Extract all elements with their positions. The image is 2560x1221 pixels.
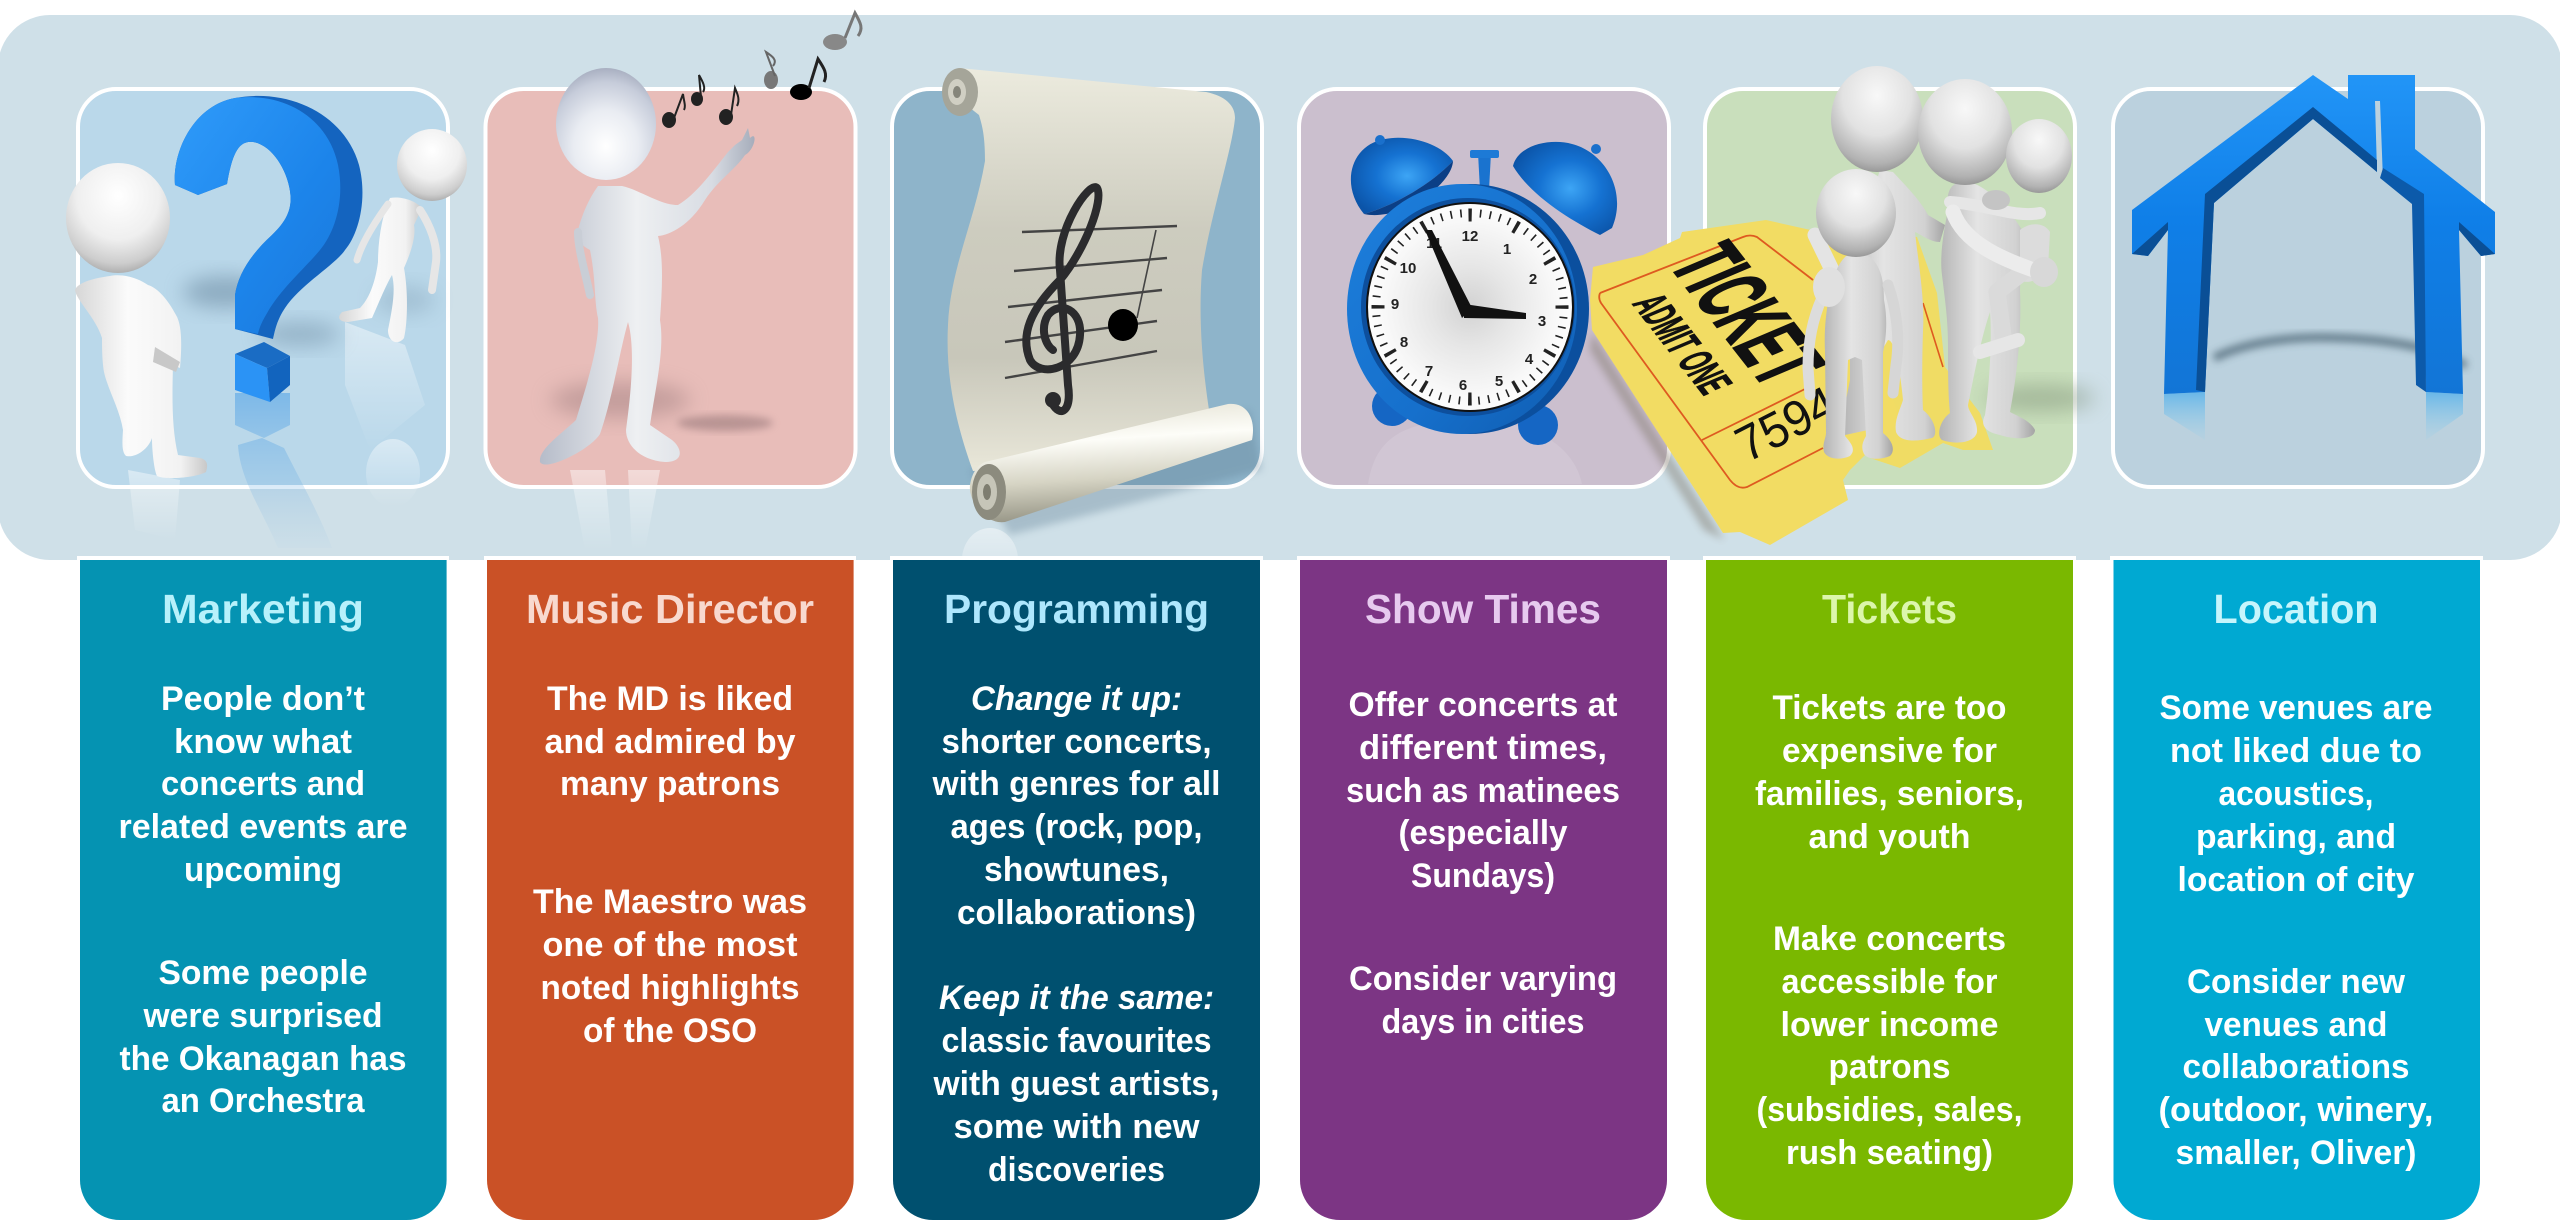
panel: music director: [484, 556, 856, 1220]
icon: right white figure: [339, 129, 467, 342]
shadow: house: [2214, 338, 2466, 366]
icon: carried child: [1950, 119, 2072, 352]
text block: keep it the same: discoveries: [988, 1151, 1165, 1189]
text block: show times second point: days in cities: [1382, 1003, 1584, 1041]
icon: front ticket: [1590, 220, 1900, 545]
icon: family of white figures: [1808, 66, 2072, 459]
text block: location second point: smaller, Oliver): [2176, 1134, 2416, 1172]
icon: clock face: [1367, 203, 1573, 411]
text block: show times first point: [1346, 686, 1620, 895]
text block: location first point: not liked due to: [2170, 732, 2422, 770]
shadow: front ticket: [1590, 332, 1724, 540]
shadow: scroll: [970, 410, 1262, 535]
text block: music director second point: [533, 883, 807, 1050]
text block: marketing second point: an Orchestra: [162, 1082, 366, 1120]
heading: show times: Show Times: [1365, 586, 1601, 632]
icon: figure reflections: [128, 322, 425, 540]
heading: programming: Programming: [944, 586, 1209, 632]
text block: tickets first point: [1755, 689, 2024, 856]
panel: marketing: [77, 556, 449, 1220]
panel: location: [2110, 556, 2483, 1220]
text block: location second point: venues and: [2204, 1006, 2388, 1044]
text block: change it up: collaborations): [957, 894, 1196, 932]
text block: music director first point: and admired by: [544, 723, 796, 761]
text block: marketing first point: concerts and: [161, 765, 365, 803]
text block: location first point: acoustics,: [2218, 775, 2374, 813]
heading: tickets: Tickets: [1822, 586, 1957, 632]
icon: clock reflection: [1368, 420, 1582, 484]
icon: bells: [1351, 135, 1617, 235]
icon: bottom roll: [970, 404, 1253, 522]
text block: tickets first point: and youth: [1808, 818, 1970, 856]
shadow: singer: [550, 382, 773, 431]
text: clock numerals: 4: [1525, 351, 1534, 368]
text: clock numerals: 1: [1503, 241, 1511, 258]
text block: tickets second point: lower income: [1780, 1006, 1998, 1044]
icon: note head: [1108, 309, 1138, 341]
text: clock numerals: 7: [1425, 363, 1433, 380]
illustration card: marketing: [66, 89, 467, 548]
text block: location first point: parking, and: [2196, 818, 2396, 856]
text block: show times first point: (especially: [1398, 814, 1568, 852]
illustration card: music director: [486, 13, 861, 550]
text block: marketing first point: related events are: [118, 808, 408, 846]
text: ticket number: 7594: [1727, 375, 1846, 473]
text block: location first point: [2160, 689, 2432, 899]
text block: marketing first point: [118, 680, 408, 889]
shadow: question mark: [183, 276, 435, 346]
icon: scroll reflection: [962, 528, 1018, 592]
panel: programming: [890, 556, 1263, 1220]
text block: tickets second point: accessible for: [1782, 963, 1998, 1001]
text block: keep it the same: Keep it the same:: [939, 979, 1214, 1017]
icon: front child: [1808, 169, 1898, 459]
text block: location second point: collaborations: [2182, 1048, 2410, 1086]
text block: tickets second point: Make concerts: [1773, 920, 2006, 958]
text block: music director first point: [544, 680, 796, 803]
panel: top illustration band: [0, 15, 2560, 560]
text block: keep it the same: [933, 979, 1220, 1189]
icon: question mark reflection: [235, 393, 332, 548]
text block: tickets first point: expensive for: [1782, 732, 1997, 770]
text: clock numerals: 9: [1391, 296, 1399, 313]
text block: location first point: location of city: [2178, 861, 2415, 899]
text block: show times first point: Sundays): [1411, 857, 1555, 895]
icon: left white figure: [66, 163, 207, 478]
icon: treble clef: [1026, 187, 1098, 411]
icon: singer reflection: [570, 470, 660, 550]
text block: show times first point: such as matinees: [1346, 772, 1620, 810]
shadow: family: [1985, 385, 2095, 411]
text block: tickets second point: rush seating): [1786, 1134, 1993, 1172]
text block: keep it the same: some with new: [954, 1108, 1200, 1146]
text block: marketing first point: know what: [174, 723, 352, 761]
text block: marketing first point: upcoming: [184, 851, 342, 889]
text: ticket title: TICKET: [1648, 231, 1845, 398]
text block: location second point: [2158, 963, 2434, 1172]
text: clock numerals: 2: [1529, 271, 1537, 288]
icon: music notes: [662, 13, 861, 128]
text: clock numerals: 3: [1538, 313, 1546, 330]
icon: alarm clock: [1347, 135, 1617, 445]
text block: marketing second point: [120, 954, 406, 1120]
text block: location second point: Consider new: [2187, 963, 2406, 1001]
text block: location first point: Some venues are: [2160, 689, 2432, 727]
heading: music director: Music Director: [526, 586, 814, 632]
illustration card: show times: [1299, 89, 1669, 487]
text block: marketing second point: were surprised: [143, 997, 382, 1035]
text: clock numerals: 10: [1400, 260, 1416, 277]
text: clock numerals: 11: [1426, 235, 1442, 252]
text block: show times first point: Offer concerts at: [1348, 686, 1618, 724]
icon: tick marks: [1376, 213, 1564, 401]
text block: tickets second point: [1756, 920, 2022, 1172]
icon: clock hands: [1425, 230, 1526, 319]
icon: question mark: [175, 96, 362, 402]
illustration card: tickets: [1705, 89, 2095, 487]
text block: tickets first point: families, seniors,: [1755, 775, 2024, 813]
heading: location: Location: [2214, 586, 2378, 632]
text block: change it up: [932, 680, 1220, 932]
text: admit one: ADMIT ONE: [1622, 287, 1743, 400]
text block: change it up: with genres for all: [932, 765, 1220, 803]
text block: music director first point: many patrons: [560, 765, 780, 803]
text block: change it up: shorter concerts,: [942, 723, 1212, 761]
text block: music director first point: The MD is liked: [547, 680, 793, 718]
text block: show times first point: different times,: [1359, 729, 1607, 767]
text block: music director second point: The Maestro was: [533, 883, 807, 921]
icon: father's hand: [1813, 267, 1845, 307]
icon: house reflection: [2164, 392, 2463, 440]
icon: father: [1815, 66, 1945, 440]
text block: music director second point: of the OSO: [583, 1012, 757, 1050]
text block: marketing second point: the Okanagan has: [120, 1040, 406, 1078]
icon: feet: [1372, 386, 1558, 445]
icon: staff lines: [1005, 226, 1177, 378]
text block: show times second point: [1349, 960, 1617, 1041]
text block: keep it the same: with guest artists,: [933, 1065, 1220, 1103]
text block: tickets second point: (subsidies, sales,: [1756, 1091, 2022, 1129]
text: clock numerals: 12: [1462, 228, 1478, 245]
text block: location second point: (outdoor, winery,: [2158, 1091, 2434, 1129]
text: clock numerals: 5: [1495, 373, 1503, 390]
text block: change it up: showtunes,: [984, 851, 1169, 889]
text block: music director second point: one of the most: [542, 926, 798, 964]
icon: location card: [2113, 75, 2495, 487]
text block: change it up: Change it up:: [971, 680, 1182, 718]
icon: mother: [1918, 79, 2035, 443]
text: clock numerals: [1391, 228, 1546, 394]
icon: admission tickets: [1590, 220, 1993, 545]
icon: top curl: [942, 68, 978, 116]
text: clock numerals: 8: [1400, 334, 1408, 351]
text block: tickets second point: patrons: [1828, 1048, 1950, 1086]
icon: clock case: [1351, 184, 1589, 434]
text block: tickets first point: Tickets are too: [1772, 689, 2006, 727]
icon: singing figure: [540, 68, 755, 465]
text block: music director second point: noted highlights: [540, 969, 800, 1007]
heading: marketing: Marketing: [162, 586, 364, 632]
text block: keep it the same: classic favourites: [942, 1022, 1212, 1060]
icon: house: [2132, 75, 2495, 394]
illustration card: programming: [892, 68, 1262, 592]
panel: show times: [1297, 556, 1670, 1220]
icon: back ticket: [1766, 222, 1993, 468]
text: clock numerals: 6: [1459, 377, 1467, 394]
icon: music scroll: [942, 68, 1253, 522]
text block: change it up: ages (rock, pop,: [950, 808, 1202, 846]
text block: show times second point: Consider varying: [1349, 960, 1617, 998]
text block: marketing first point: People don’t: [161, 680, 365, 718]
panel: tickets: [1703, 556, 2076, 1220]
text block: marketing second point: Some people: [158, 954, 368, 992]
